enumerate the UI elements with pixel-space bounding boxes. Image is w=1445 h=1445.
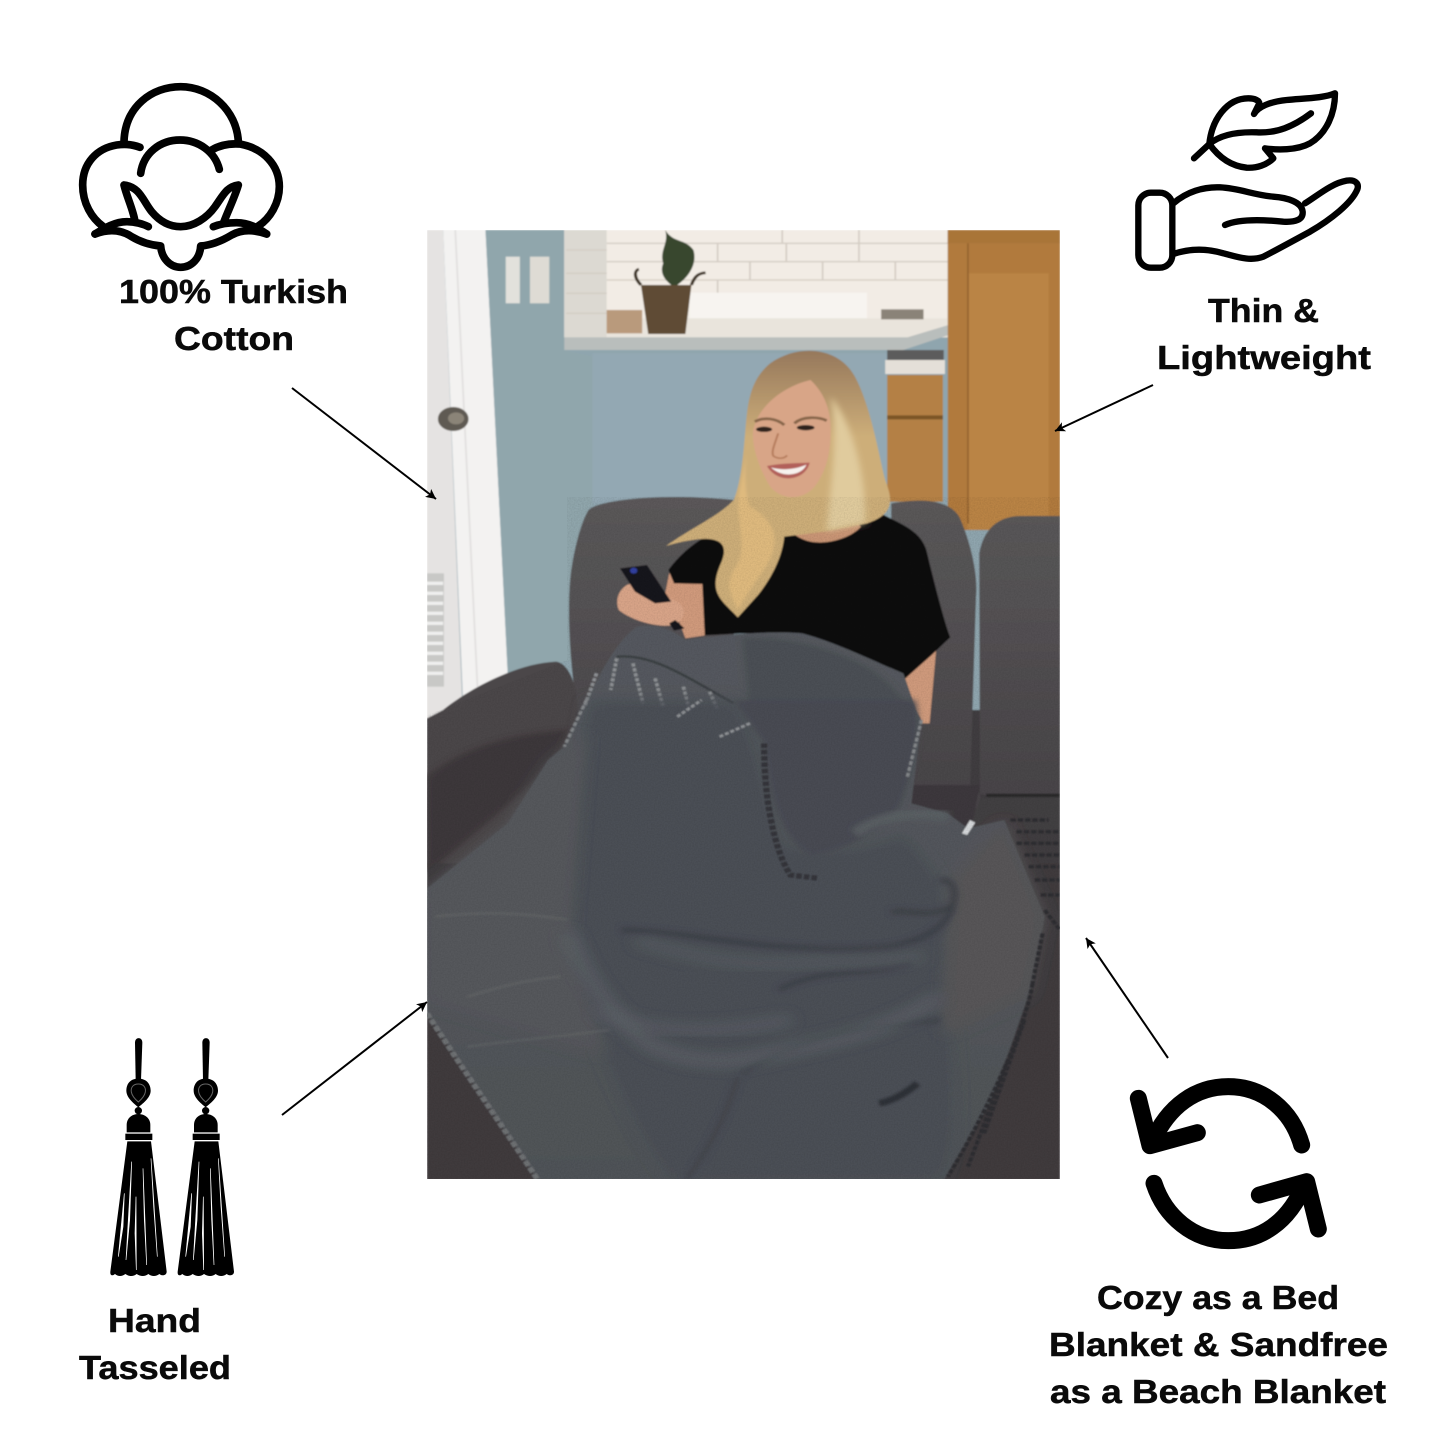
- plant: [635, 230, 706, 334]
- label: Hand Tasseled: Tasseled: [79, 1349, 231, 1386]
- label: 100% Turkish Cotton: 100% Turkish: [119, 273, 348, 310]
- label: Thin & Lightweight: [1157, 292, 1371, 376]
- arrow: lightweight to photo: [1055, 385, 1153, 431]
- left tassel: [110, 1038, 167, 1276]
- label: Cozy as a Bed Blanket & Sandfree as a Beach Blanket: [1049, 1279, 1388, 1410]
- arrow: tassels to photo: [282, 1002, 427, 1115]
- label: Hand Tasseled: [79, 1302, 231, 1386]
- label: Hand Tasseled: Hand: [108, 1302, 201, 1339]
- label: Thin & Lightweight: Thin &: [1208, 292, 1319, 329]
- label: 100% Turkish Cotton: [119, 273, 348, 357]
- blanket over lap and draped: [427, 626, 1045, 1180]
- label: Thin & Lightweight: Lightweight: [1157, 339, 1371, 376]
- label: 100% Turkish Cotton: Cotton: [174, 320, 294, 357]
- remote and hand: [617, 565, 685, 631]
- icon: pair of tassels: [110, 1038, 234, 1276]
- arrow: reversible to photo: [1086, 938, 1168, 1058]
- label: Cozy as a Bed Blanket & Sandfree as a Beach Blanket: Blanket & Sandfree: [1049, 1326, 1388, 1363]
- photo scene: room, woman, couch and blanket: [427, 230, 1060, 1180]
- icon: reversible circular arrows: [1138, 1087, 1318, 1241]
- woman: [665, 351, 950, 723]
- sofa: [427, 497, 1060, 1180]
- icon: leaf over open hand: [1138, 93, 1358, 268]
- arrow: cotton to photo: [292, 388, 436, 499]
- label: Cozy as a Bed Blanket & Sandfree as a Beach Blanket: as a Beach Blanket: [1050, 1373, 1386, 1410]
- panel: product photo: [427, 230, 1060, 1180]
- label: Cozy as a Bed Blanket & Sandfree as a Beach Blanket: Cozy as a Bed: [1097, 1279, 1339, 1316]
- right tassel: [178, 1038, 234, 1276]
- icon: cotton boll: [83, 87, 279, 267]
- photo grain: [427, 497, 1060, 1179]
- blanket fringe right: [948, 820, 1060, 1177]
